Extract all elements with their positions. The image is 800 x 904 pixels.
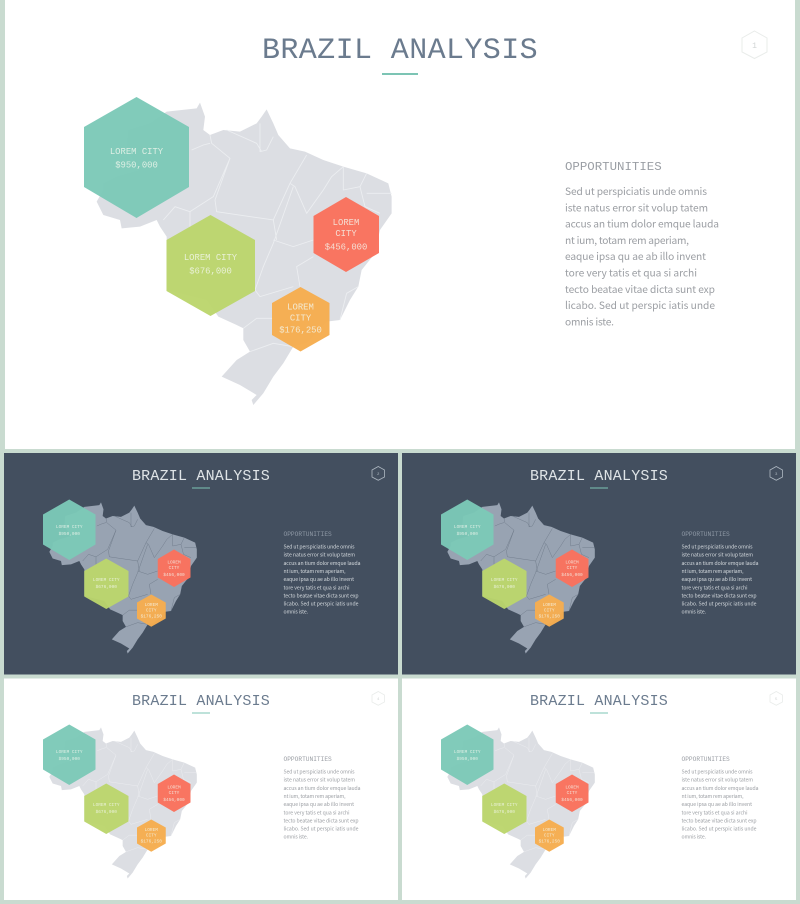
body text: iste natus error sit volup tatem (682, 777, 753, 784)
hexagon: red city: CITY (335, 229, 357, 239)
icon: page number hexagon (770, 692, 782, 705)
body text: Sed ut perspiciatis unde omnis (565, 183, 707, 198)
icon: page number hexagon (770, 466, 782, 480)
body text: omnis iste. (682, 834, 707, 841)
hexagon: green city: LOREM CITY (93, 577, 120, 583)
hexagon: green city: LOREM CITY (93, 802, 120, 808)
hexagon: teal city: $950,000 (59, 756, 80, 762)
hexagon: orange city: LOREM (543, 827, 556, 833)
body text: tore very tatis et qua si archi (284, 809, 350, 816)
icon: page number hexagon: 4 (377, 698, 380, 702)
body text: iste natus error sit volup tatem (565, 199, 708, 214)
map of Brazil (447, 502, 595, 653)
hexagon: red city: CITY (169, 565, 180, 571)
hexagon: green city: $676,000 (96, 584, 117, 590)
hexagon: red city (314, 197, 379, 272)
body text: nt ium, totam rem aperiam, (682, 793, 744, 800)
heading: opportunities: OPPORTUNITIES (284, 756, 332, 763)
body text: Sed ut perspiciatis unde omnis (682, 768, 753, 776)
hexagon: red city (556, 550, 588, 587)
hexagon: teal city (43, 724, 96, 785)
body text (682, 544, 759, 616)
body text: eaque ipsa qu ae ab illo invent (284, 576, 354, 583)
hexagon: teal city (441, 500, 494, 560)
slide 5: small light slide, right (402, 678, 796, 900)
body text: accus an tium dolor emque lauda (682, 560, 759, 567)
hexagon: red city: CITY (169, 790, 180, 796)
body text: licabo. Sed ut perspic iatis unde (284, 601, 359, 608)
hexagon: red city: LOREM (167, 560, 181, 566)
title: BRAZIL ANALYSIS (132, 468, 270, 485)
heading: opportunities: OPPORTUNITIES (284, 531, 332, 538)
slide 4: small light slide, left (4, 678, 398, 900)
hexagon: green city (482, 784, 526, 834)
hexagon: orange city: $176,250 (279, 326, 322, 336)
body text: licabo. Sed ut perspic iatis unde (682, 601, 757, 608)
body text: iste natus error sit volup tatem (682, 552, 753, 559)
heading: opportunities: OPPORTUNITIES (565, 160, 662, 174)
title: BRAZIL ANALYSIS (132, 693, 270, 710)
hexagon: teal city: $950,000 (457, 531, 478, 537)
body text: tore very tatis et qua si archi (682, 809, 748, 816)
hexagon: red city: LOREM (333, 218, 359, 228)
icon: page number hexagon: 1 (752, 42, 757, 51)
body text: tecto beatae vitae dicta sunt exp (284, 817, 358, 824)
hexagon: green city (482, 558, 526, 609)
hexagon: green city (166, 215, 255, 316)
body text: licabo. Sed ut perspic iatis unde (284, 826, 359, 833)
body text: nt ium, totam rem aperiam, (284, 793, 346, 800)
slide 2: small dark slide, left (4, 453, 398, 674)
hexagon: teal city (43, 500, 96, 560)
icon: page number hexagon (742, 31, 767, 58)
body text: tore very tatis et qua si archi (284, 584, 350, 591)
body text: omnis iste. (284, 834, 309, 841)
hexagon: red city: $456,000 (561, 797, 583, 803)
body text: eaque ipsa qu ae ab illo invent (682, 576, 752, 583)
icon: page number hexagon (372, 466, 384, 480)
body text (284, 768, 361, 841)
hexagon: green city: LOREM CITY (491, 802, 518, 808)
hexagon: orange city: $176,250 (539, 838, 560, 844)
hexagon: orange city (535, 820, 564, 852)
hexagon: green city (84, 784, 128, 834)
hexagon: green city: $676,000 (189, 266, 232, 276)
body text: accus an tium dolor emque lauda (682, 785, 759, 792)
hexagon: red city: $456,000 (561, 572, 583, 578)
hexagon: green city: $676,000 (96, 809, 117, 815)
hexagon: red city: $456,000 (163, 797, 185, 803)
body text: eaque ipsa qu ae ab illo invent (565, 248, 706, 263)
body text: omnis iste. (565, 313, 614, 328)
map of Brazil (97, 103, 392, 405)
hexagon: green city: LOREM CITY (184, 253, 238, 263)
title underline (590, 488, 608, 489)
hexagon: green city: LOREM CITY (491, 577, 518, 583)
title underline (192, 712, 210, 714)
body text: tecto beatae vitae dicta sunt exp (682, 817, 756, 824)
body text: tecto beatae vitae dicta sunt exp (565, 281, 715, 296)
hexagon: teal city (441, 724, 494, 785)
body text: iste natus error sit volup tatem (284, 777, 355, 784)
hexagon: teal city: LOREM CITY (454, 524, 481, 530)
title: BRAZIL ANALYSIS (262, 34, 538, 68)
hexagon: red city: $456,000 (325, 242, 367, 252)
map of Brazil (49, 727, 197, 878)
hexagon: teal city: $950,000 (115, 160, 158, 170)
hexagon: red city (158, 774, 190, 812)
hexagon: orange city: CITY (290, 314, 312, 324)
hexagon: orange city: CITY (146, 832, 157, 838)
body text: Sed ut perspiciatis unde omnis (284, 544, 355, 550)
hexagon: red city: LOREM (565, 560, 579, 566)
hexagon: red city: LOREM (167, 784, 181, 790)
body text: eaque ipsa qu ae ab illo invent (682, 801, 752, 808)
body text (565, 183, 719, 328)
hexagon: teal city: $950,000 (59, 531, 80, 537)
heading: opportunities: OPPORTUNITIES (682, 756, 730, 763)
map of Brazil (447, 727, 595, 878)
body text: nt ium, totam rem aperiam, (565, 232, 689, 247)
hexagon: teal city: LOREM CITY (110, 147, 164, 157)
body text: nt ium, totam rem aperiam, (284, 568, 346, 575)
slide 1: large light slide (5, 0, 795, 449)
icon: page number hexagon: 2 (377, 473, 380, 477)
hexagon: orange city: CITY (544, 832, 555, 838)
hexagon: orange city: $176,250 (141, 613, 162, 619)
body text: licabo. Sed ut perspic iatis unde (682, 826, 757, 833)
body text: eaque ipsa qu ae ab illo invent (284, 801, 354, 808)
body text: accus an tium dolor emque lauda (284, 785, 361, 792)
body text: Sed ut perspiciatis unde omnis (284, 768, 355, 776)
hexagon: teal city: LOREM CITY (56, 524, 83, 530)
hexagon: red city: $456,000 (163, 572, 185, 578)
hexagon: red city: CITY (567, 565, 578, 571)
hexagon: red city (556, 774, 588, 812)
body text (284, 544, 361, 616)
body text: iste natus error sit volup tatem (284, 552, 355, 559)
hexagon: orange city: LOREM (145, 827, 158, 833)
title underline (590, 712, 608, 714)
heading: opportunities: OPPORTUNITIES (682, 531, 730, 538)
hexagon: orange city: CITY (146, 607, 157, 613)
hexagon: orange city: LOREM (287, 302, 314, 312)
hexagon: orange city (137, 820, 166, 852)
hexagon: orange city: $176,250 (539, 613, 560, 619)
title underline (192, 488, 210, 489)
title underline (382, 73, 418, 75)
title: BRAZIL ANALYSIS (530, 468, 668, 485)
body text: tecto beatae vitae dicta sunt exp (284, 592, 358, 599)
hexagon: orange city: LOREM (543, 602, 556, 608)
body text: accus an tium dolor emque lauda (565, 216, 719, 231)
hexagon: green city (84, 558, 128, 609)
icon: page number hexagon: 3 (775, 473, 778, 477)
hexagon: teal city: $950,000 (457, 756, 478, 762)
map of Brazil (49, 502, 197, 653)
title: BRAZIL ANALYSIS (530, 693, 668, 710)
icon: page number hexagon: 5 (775, 698, 778, 702)
slide 3: small dark slide, right (402, 453, 796, 674)
body text: tore very tatis et qua si archi (565, 264, 697, 280)
body text: tore very tatis et qua si archi (682, 584, 748, 591)
hexagon: teal city: LOREM CITY (56, 749, 83, 755)
body text: Sed ut perspiciatis unde omnis (682, 544, 753, 550)
body text: omnis iste. (682, 609, 707, 616)
hexagon: orange city: $176,250 (141, 838, 162, 844)
icon: page number hexagon (372, 692, 384, 705)
hexagon: teal city (84, 97, 189, 218)
hexagon: orange city (535, 594, 564, 627)
hexagon: orange city (272, 287, 330, 352)
body text: accus an tium dolor emque lauda (284, 560, 361, 567)
body text: nt ium, totam rem aperiam, (682, 568, 744, 575)
hexagon: teal city: LOREM CITY (454, 749, 481, 755)
hexagon: red city: CITY (567, 790, 578, 796)
body text: omnis iste. (284, 609, 309, 616)
hexagon: red city: LOREM (565, 784, 579, 790)
hexagon: green city: $676,000 (494, 584, 515, 590)
hexagon: orange city: LOREM (145, 602, 158, 608)
body text (682, 768, 759, 841)
hexagon: orange city: CITY (544, 607, 555, 613)
hexagon: orange city (137, 594, 166, 627)
body text: licabo. Sed ut perspic iatis unde (565, 297, 715, 312)
hexagon: red city (158, 550, 190, 587)
body text: tecto beatae vitae dicta sunt exp (682, 592, 756, 599)
hexagon: green city: $676,000 (494, 809, 515, 815)
